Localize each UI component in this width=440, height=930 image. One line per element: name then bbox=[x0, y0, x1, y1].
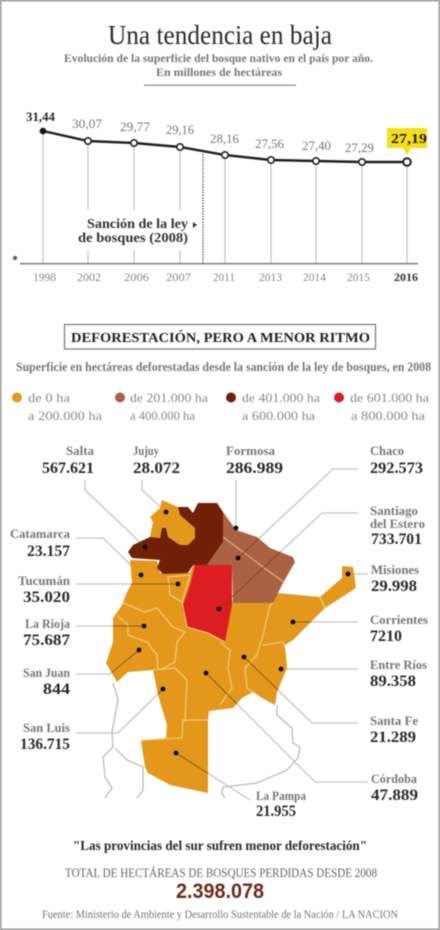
subtitle: Evolución de la superficie del bosque nativo en el país por año. bbox=[64, 51, 373, 65]
label: Misiones bbox=[371, 563, 419, 595]
year axis labels bbox=[33, 270, 418, 284]
law annotation bbox=[78, 216, 188, 245]
label: Formosa: 286.989 bbox=[226, 460, 283, 477]
label: Salta: Salta bbox=[66, 444, 95, 458]
law arrow bbox=[193, 222, 197, 228]
year axis labels: 2007 bbox=[166, 270, 191, 284]
data value labels: 29,16 bbox=[166, 122, 194, 137]
orange provinces bbox=[106, 560, 356, 793]
data value labels: 27,56 bbox=[255, 136, 284, 151]
neighbouring province outlines bbox=[103, 683, 300, 798]
label: Corrientes bbox=[370, 613, 428, 645]
label: Tucumán bbox=[18, 574, 70, 606]
data value labels: 31,44 bbox=[26, 109, 55, 124]
label: Corrientes: Corrientes bbox=[370, 613, 428, 627]
data points bbox=[40, 128, 411, 166]
data value labels: 30,07 bbox=[72, 116, 103, 131]
highlighted latest value: 27,19 bbox=[391, 132, 427, 147]
legend item: 201000 to 400000 bbox=[115, 390, 208, 423]
label: Santa Fe bbox=[370, 714, 418, 746]
red province: Santiago del Estero bbox=[182, 565, 232, 642]
year axis labels: 2016 bbox=[394, 270, 418, 284]
year axis labels: 1998 bbox=[33, 270, 56, 284]
year axis labels: 2002 bbox=[77, 270, 101, 284]
label: Santiago del Estero: Santiago bbox=[370, 504, 418, 518]
map of Argentina provinces bbox=[76, 469, 368, 800]
chart drop lines bbox=[43, 131, 407, 263]
year axis labels: 2014 bbox=[303, 270, 326, 284]
highlighted latest value bbox=[387, 128, 427, 155]
legend item: 201000 to 400000: a 400.000 ha bbox=[130, 408, 195, 423]
label: Tucumán: 35.020 bbox=[23, 589, 70, 606]
legend item: 601000 to 800000 bbox=[334, 390, 429, 423]
label: La Pampa: 21.955 bbox=[256, 803, 296, 820]
label: Catamarca bbox=[10, 527, 71, 560]
label: Entre Ríos bbox=[370, 658, 427, 690]
province dots bbox=[137, 510, 350, 755]
label: San Luis: 136.715 bbox=[20, 736, 70, 753]
chart baseline bbox=[20, 263, 418, 264]
label: San Juan: 844 bbox=[43, 681, 70, 698]
quote: "Las provincias del sur sufren menor deforestación" bbox=[73, 838, 367, 853]
label: Chaco bbox=[370, 444, 423, 477]
label: Corrientes: 7210 bbox=[370, 628, 402, 645]
legend item: 401000 to 600000 bbox=[226, 390, 320, 423]
label: Entre Ríos: 89.358 bbox=[370, 673, 416, 690]
legend item: 0 to 200000: de 0 ha bbox=[28, 390, 70, 405]
data value labels: 27,29 bbox=[345, 140, 374, 155]
total number: 2.398.078 bbox=[176, 880, 264, 903]
source: Fuente: Ministerio de Ambiente y Desarrollo Sustentable de la Nación / LA NACION bbox=[42, 909, 399, 921]
label: Formosa bbox=[226, 444, 283, 477]
legend item: 401000 to 600000: a 600.000 ha bbox=[242, 408, 315, 423]
label: Santiago del Estero bbox=[370, 504, 425, 548]
label: San Luis bbox=[20, 721, 70, 753]
label: La Pampa: La Pampa bbox=[256, 789, 307, 803]
label: Jujuy bbox=[133, 444, 180, 477]
label: Tucumán: Tucumán bbox=[18, 574, 70, 588]
total label: TOTAL DE HECTÁREAS DE BOSQUES PERDIDAS DESDE 2008 bbox=[65, 866, 377, 880]
label: La Rioja: 75.687 bbox=[23, 632, 70, 649]
label: Córdoba: Córdoba bbox=[371, 772, 418, 786]
label: Santa Fe: 21.289 bbox=[370, 729, 416, 746]
label: San Juan bbox=[23, 666, 70, 698]
section heading box: DEFORESTACIÓN, PERO A MENOR RITMO bbox=[71, 329, 370, 346]
label: Santa Fe: Santa Fe bbox=[370, 714, 418, 728]
subtitle bbox=[64, 51, 373, 79]
line chart: native forest surface by year bbox=[13, 109, 427, 284]
label: San Luis: San Luis bbox=[23, 721, 70, 735]
title: Una tendencia en baja bbox=[108, 20, 332, 50]
year axis labels: 2011 bbox=[213, 270, 235, 284]
label: Entre Ríos: Entre Ríos bbox=[370, 658, 427, 672]
year axis labels: 2013 bbox=[259, 270, 282, 284]
legend item: 201000 to 400000: de 201.000 ha bbox=[130, 390, 208, 405]
section heading box bbox=[64, 324, 376, 349]
data line bbox=[43, 131, 407, 162]
subtitle: En millones de hectáreas bbox=[156, 65, 282, 79]
label: Jujuy: Jujuy bbox=[133, 444, 160, 458]
label: Misiones: 29.998 bbox=[371, 578, 417, 595]
province borders bbox=[117, 537, 325, 740]
law annotation: de bosques (2008) bbox=[78, 230, 188, 245]
label: La Pampa bbox=[256, 789, 307, 820]
year axis labels: 2006 bbox=[124, 270, 149, 284]
legend item: 601000 to 800000: de 601.000 ha bbox=[350, 390, 429, 405]
label: Chaco: Chaco bbox=[370, 444, 404, 458]
data value labels: 28,16 bbox=[210, 131, 239, 146]
label: Córdoba: 47.889 bbox=[371, 787, 418, 804]
dark province: Salta bbox=[128, 503, 223, 574]
brown provinces: Formosa and Chaco bbox=[207, 512, 295, 603]
label: Santiago del Estero: del Estero bbox=[370, 517, 425, 531]
data value labels: 29,77 bbox=[120, 119, 151, 134]
label: Córdoba bbox=[371, 772, 418, 804]
label: Salta bbox=[42, 444, 95, 477]
label: Santiago del Estero: 733.701 bbox=[371, 531, 422, 548]
year axis labels: 2015 bbox=[347, 270, 370, 284]
data value labels bbox=[26, 109, 374, 155]
legend bbox=[12, 390, 429, 423]
label: San Juan: San Juan bbox=[23, 666, 70, 680]
label: Misiones: Misiones bbox=[371, 563, 419, 577]
leader lines over the map bbox=[111, 538, 312, 774]
label: Formosa: Formosa bbox=[226, 444, 276, 458]
label: Catamarca: 23.157 bbox=[27, 543, 70, 560]
label: La Rioja bbox=[23, 617, 71, 649]
data value labels: 27,40 bbox=[302, 138, 331, 153]
label: Salta: 567.621 bbox=[42, 460, 94, 477]
legend item: 0 to 200000: a 200.000 ha bbox=[28, 408, 102, 423]
label: Catamarca: Catamarca bbox=[10, 527, 71, 541]
legend item: 401000 to 600000: de 401.000 ha bbox=[242, 390, 320, 405]
leader lines bbox=[76, 469, 368, 800]
label: Jujuy: 28.072 bbox=[133, 460, 180, 477]
legend item: 0 to 200000 bbox=[12, 390, 102, 423]
orange north province: Jujuy bbox=[150, 500, 195, 545]
legend item: 601000 to 800000: a 800.000 ha bbox=[351, 408, 425, 423]
law marker dotted line bbox=[202, 154, 204, 263]
label: Chaco: 292.573 bbox=[370, 460, 423, 477]
law annotation: Sanción de la ley bbox=[87, 216, 188, 231]
label: La Rioja: La Rioja bbox=[25, 617, 71, 631]
